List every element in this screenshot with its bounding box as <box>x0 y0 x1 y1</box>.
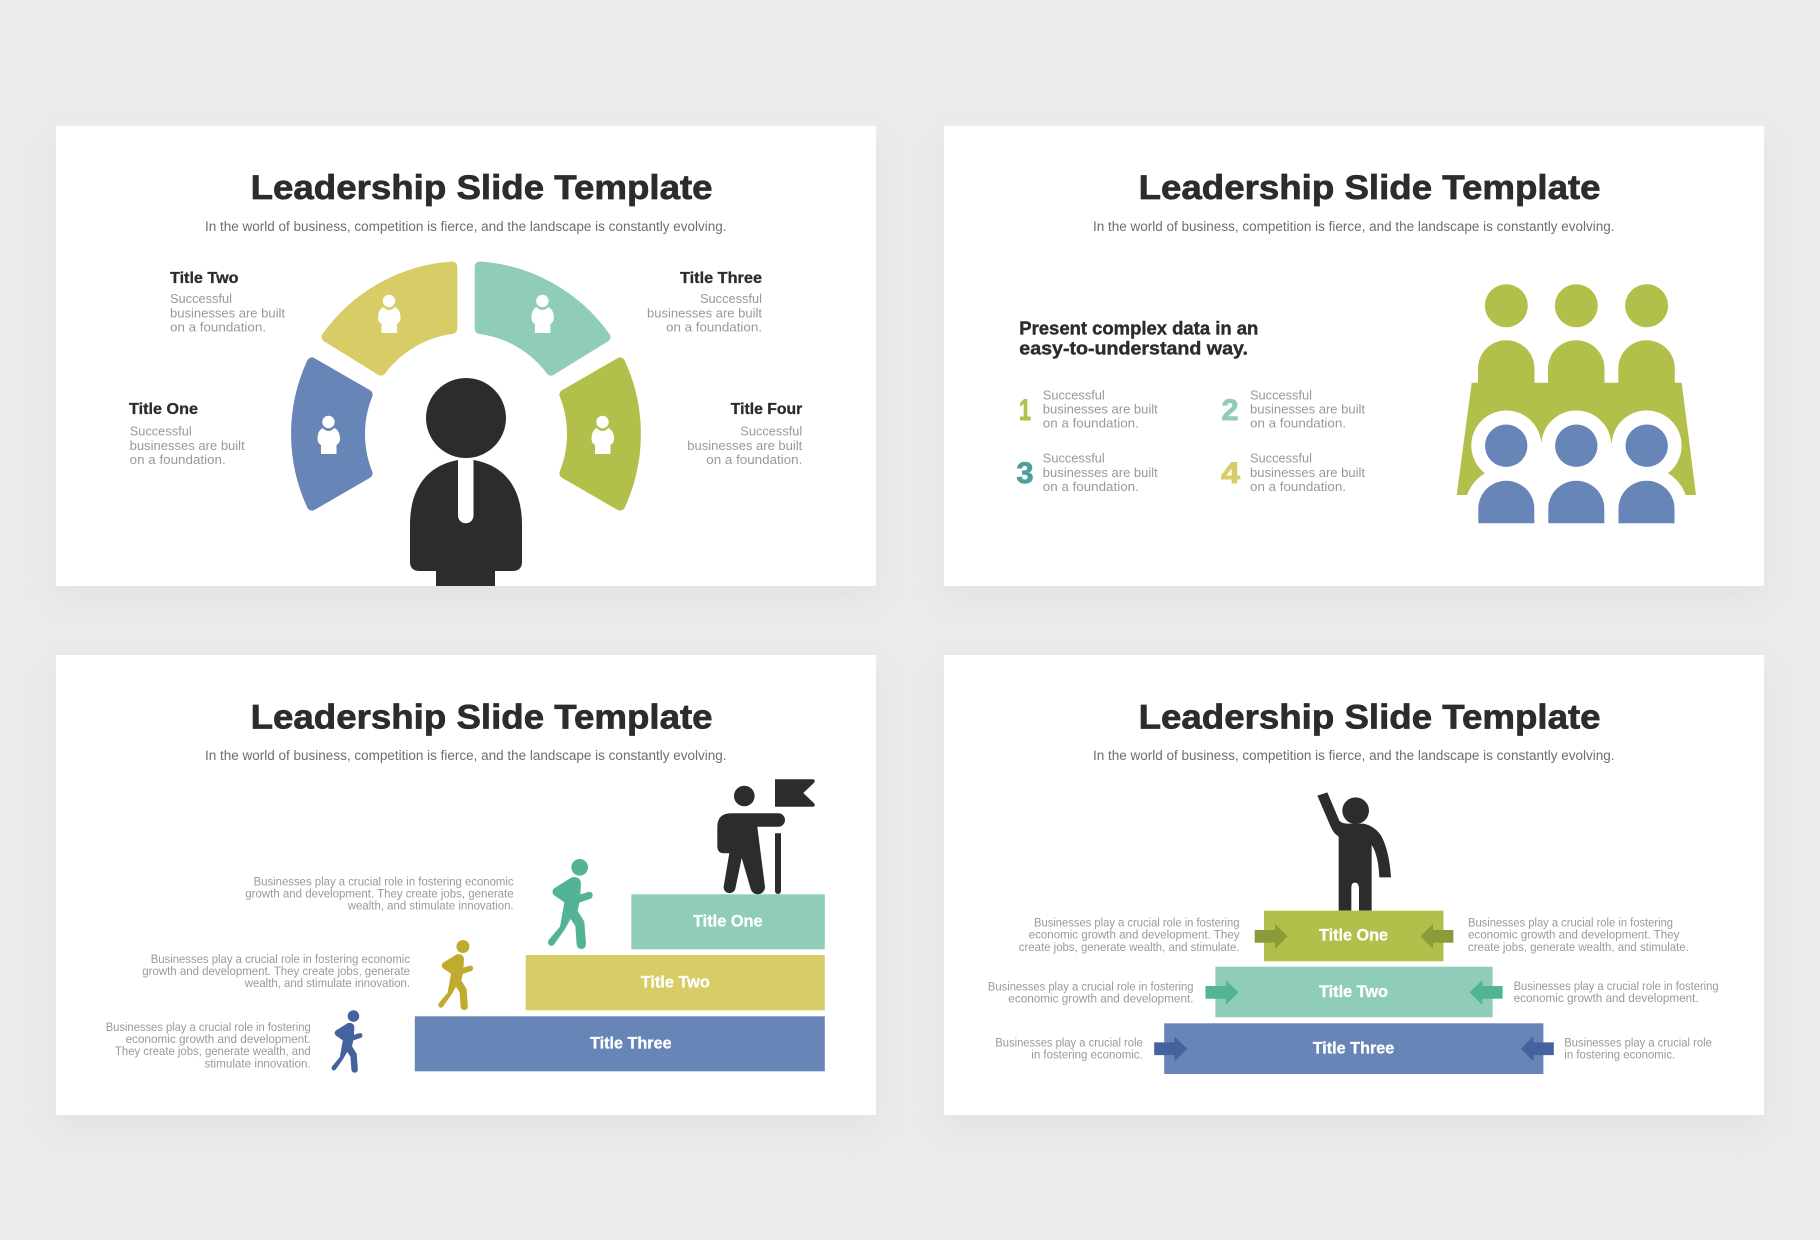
list item 3: businesses are built <box>1043 465 1158 480</box>
list item 3 <box>1016 451 1158 494</box>
list item 2: 2 <box>1222 394 1238 427</box>
list item 1: Successful <box>1043 387 1105 402</box>
text block: tier one left: economic growth and development. They <box>1029 928 1240 942</box>
tier: Title Three <box>1164 1023 1543 1074</box>
text block: tier three left: in fostering economic. <box>1031 1048 1143 1062</box>
text block: lead statement <box>1019 317 1258 359</box>
subtitle: In the world of business, competition is fierce, and the landscape is constantly evolving. <box>1093 748 1614 763</box>
list item 3: on a foundation. <box>1043 479 1139 494</box>
arrow: tier one left <box>1255 924 1288 949</box>
icon: walking person teal <box>548 859 593 949</box>
list item 2 <box>1222 387 1365 431</box>
list item 2: on a foundation. <box>1250 416 1346 431</box>
heading: Leadership Slide Template <box>1139 169 1601 207</box>
arrow: tier three right <box>1521 1036 1554 1061</box>
text block: tier one left: Businesses play a crucial role in fostering <box>1034 916 1240 930</box>
text block: Title One: on a foundation. <box>130 452 226 467</box>
text block: Title Two: on a foundation. <box>170 320 266 334</box>
text block: tier one right: create jobs, generate wealth, and stimulate. <box>1468 940 1689 954</box>
text block: Title One: Successful <box>130 424 192 438</box>
icon: person on green segment <box>592 416 614 454</box>
text block: step two description <box>142 952 410 990</box>
text block: tier three right: in fostering economic. <box>1564 1048 1675 1062</box>
text block: tier one right: economic growth and development. They <box>1468 928 1680 942</box>
text block: Title Two: Successful <box>170 291 232 306</box>
panel: semicircle leadership slide <box>56 126 876 598</box>
heading: Leadership Slide Template <box>251 169 713 207</box>
step: Title Three <box>415 1016 825 1071</box>
heading: Leadership Slide Template <box>251 698 713 736</box>
list item 4: on a foundation. <box>1250 479 1346 494</box>
arrow: tier one right <box>1420 924 1453 949</box>
panel: pyramid slide <box>944 655 1764 1127</box>
text block: step one description: wealth, and stimulate innovation. <box>347 898 514 912</box>
text block: step two description: wealth, and stimulate innovation. <box>244 976 410 990</box>
list item 4: 4 <box>1221 457 1240 490</box>
list item 4: businesses are built <box>1250 465 1365 480</box>
icon: person on yellow segment <box>378 295 400 333</box>
segment: green <box>564 362 636 506</box>
subtitle: In the world of business, competition is fierce, and the landscape is constantly evolving. <box>205 219 726 234</box>
text block: lead statement: easy-to-understand way. <box>1019 338 1248 359</box>
arrow: tier two left <box>1206 980 1238 1005</box>
text block: step two description: Businesses play a crucial role in fostering economic <box>151 952 410 966</box>
text block: step one description <box>245 874 514 912</box>
text block: tier one right <box>1468 916 1689 954</box>
text block: Title Four <box>687 401 803 467</box>
arrow: tier three left <box>1154 1036 1187 1061</box>
icon: team at table <box>1457 284 1696 530</box>
text block: Title One: businesses are built <box>130 438 245 453</box>
text block: Title Two: businesses are built <box>170 306 285 320</box>
text block: step one description: Businesses play a crucial role in fostering economic <box>254 874 514 888</box>
subtitle: In the world of business, competition is fierce, and the landscape is constantly evolving. <box>1093 219 1614 234</box>
text block: Title Four: Title Four <box>731 401 802 418</box>
step: Title One <box>631 894 825 949</box>
step: Title Two: Title Two <box>641 973 710 991</box>
text block: step three description: Businesses play a crucial role in fostering <box>106 1020 311 1034</box>
tier: Title Two <box>1215 967 1493 1017</box>
icon: central leader figure <box>410 378 522 586</box>
text block: Title Four: businesses are built <box>687 438 803 453</box>
text block: Title Three: on a foundation. <box>666 320 762 334</box>
text block: tier two right <box>1514 979 1719 1005</box>
list item 1: on a foundation. <box>1043 416 1139 431</box>
green back row <box>1457 284 1696 495</box>
list item 2: Successful <box>1250 387 1312 402</box>
icon: leader with flag <box>717 779 815 894</box>
white halos <box>1471 410 1682 530</box>
list item 4 <box>1221 451 1365 494</box>
list item 1 <box>1019 387 1158 431</box>
text block: tier two left <box>988 980 1194 1006</box>
text block: tier two right: Businesses play a crucial role in fostering <box>1514 979 1719 993</box>
text block: tier three left <box>995 1036 1143 1062</box>
text block: tier one right: Businesses play a crucial role in fostering <box>1468 916 1673 930</box>
tier: Title Three: Title Three <box>1313 1039 1394 1057</box>
text block: tier one left: create jobs, generate wealth, and stimulate. <box>1019 940 1240 954</box>
text block: tier two left: Businesses play a crucial role in fostering <box>988 980 1194 994</box>
heading: Leadership Slide Template <box>1139 698 1601 736</box>
text block: step two description: growth and development. They create jobs, generate <box>142 964 410 978</box>
icon: walking person blue <box>332 1010 362 1073</box>
text block: tier three right: Businesses play a crucial role <box>1564 1036 1712 1050</box>
step: Title Three: Title Three <box>590 1034 672 1052</box>
text block: Title One: Title One <box>129 401 198 418</box>
list item 3: Successful <box>1043 451 1105 466</box>
text block: tier two left: economic growth and development. <box>1008 992 1194 1006</box>
step: Title Two <box>526 955 825 1010</box>
text block: Title One <box>129 401 245 467</box>
text block: tier one left <box>1019 916 1240 954</box>
panel: team audience slide <box>944 126 1764 598</box>
list item 1: 1 <box>1019 394 1031 427</box>
text block: step one description: growth and development. They create jobs, generate <box>245 886 514 900</box>
step: Title One: Title One <box>693 913 763 931</box>
text block: Title Three: Title Three <box>680 270 762 287</box>
tier: Title Two: Title Two <box>1319 983 1388 1001</box>
text block: step three description: They create jobs, generate wealth, and <box>115 1044 311 1058</box>
icon: walking person yellow <box>438 940 473 1010</box>
icon: leader raising arm <box>1317 792 1391 911</box>
subtitle: In the world of business, competition is fierce, and the landscape is constantly evolving. <box>205 748 726 763</box>
text block: Title Four: Successful <box>740 424 802 438</box>
list item 3: 3 <box>1016 457 1034 490</box>
segment: yellow <box>326 266 452 371</box>
tier: Title One: Title One <box>1319 927 1388 945</box>
text block: step three description: stimulate innovation. <box>204 1056 311 1070</box>
arrow: tier two right <box>1470 980 1503 1005</box>
text block: Title Three <box>647 270 762 334</box>
text block: step three description: economic growth and development. <box>126 1032 311 1046</box>
text block: tier two right: economic growth and development. <box>1514 991 1699 1005</box>
panel: stairs slide <box>56 655 876 1127</box>
text block: Title Four: on a foundation. <box>706 452 802 467</box>
text block: Title Two <box>170 270 285 334</box>
list item 4: Successful <box>1250 451 1312 466</box>
text block: lead statement: Present complex data in an <box>1019 317 1258 338</box>
segment: blue <box>296 362 368 506</box>
text block: tier three left: Businesses play a crucial role <box>995 1036 1143 1050</box>
text block: tier three right <box>1564 1036 1712 1062</box>
list item 1: businesses are built <box>1043 402 1158 417</box>
icon: person on blue segment <box>318 416 340 454</box>
segment: teal <box>480 266 606 371</box>
text block: Title Three: Successful <box>700 291 762 306</box>
text block: Title Two: Title Two <box>170 270 238 287</box>
text block: step three description <box>106 1020 311 1070</box>
text block: Title Three: businesses are built <box>647 306 762 320</box>
tier: Title One <box>1264 911 1444 961</box>
blue front row <box>1478 424 1674 523</box>
list item 2: businesses are built <box>1250 402 1365 417</box>
icon: person on teal segment <box>531 295 554 333</box>
